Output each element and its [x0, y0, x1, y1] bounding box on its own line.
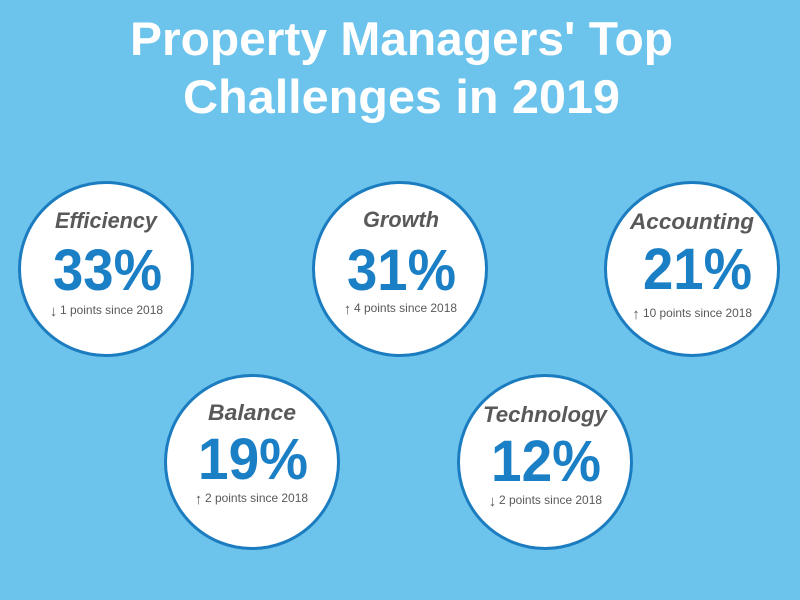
panel: Technology: ↓	[489, 493, 496, 510]
panel: Efficiency: Efficiency	[55, 208, 159, 233]
title: Property Managers' Top	[130, 12, 673, 65]
panel: Technology: 12%	[491, 429, 601, 494]
title	[130, 12, 673, 123]
panel: Balance: 19%	[198, 427, 308, 492]
panel: Accounting: 21%	[643, 237, 752, 302]
panel: Growth: Growth	[363, 207, 439, 232]
title: Challenges in 2019	[183, 70, 620, 123]
panel: Efficiency: 1 points since 2018	[60, 303, 163, 317]
panel: Efficiency: ↓	[50, 303, 57, 320]
panel: Technology: 2 points since 2018	[499, 493, 602, 507]
panel: Balance: ↑	[195, 491, 202, 508]
panel: Growth: 31%	[347, 238, 456, 303]
panel: Growth: 4 points since 2018	[354, 301, 457, 315]
panel: Growth	[314, 182, 486, 356]
panel: Technology: Technology	[483, 402, 609, 427]
panel: Balance	[166, 376, 338, 548]
panel: Technology	[458, 376, 632, 548]
panel: Accounting: 10 points since 2018	[643, 306, 752, 320]
panel: Accounting	[606, 182, 778, 356]
panel: Accounting: ↑	[632, 306, 640, 323]
panel: Efficiency: 33%	[53, 238, 162, 303]
panel: Balance: Balance	[208, 400, 296, 425]
panel: Balance: 2 points since 2018	[205, 491, 308, 505]
panel: Growth: ↑	[344, 301, 351, 318]
panel: Accounting: Accounting	[629, 209, 755, 234]
panel: Efficiency	[20, 182, 192, 356]
